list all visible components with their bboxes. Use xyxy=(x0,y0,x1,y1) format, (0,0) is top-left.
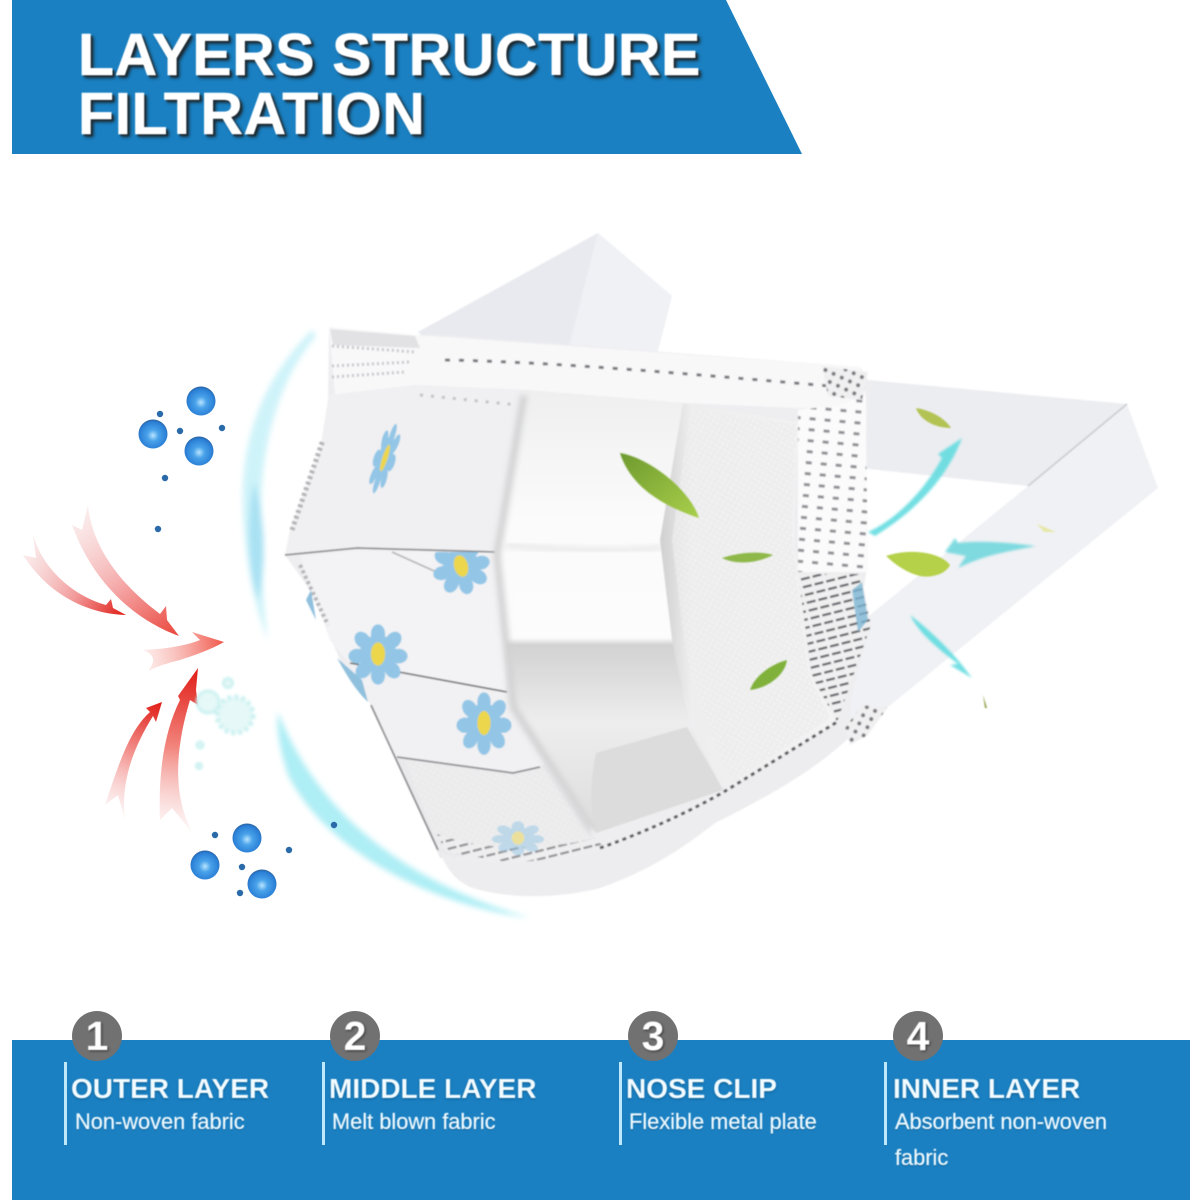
feature: outer layer: 1 xyxy=(86,1013,108,1059)
cyan airflow arrows on exit xyxy=(868,438,1036,678)
feature: outer layer xyxy=(71,1013,269,1134)
feature: inner layer: 4 xyxy=(907,1013,929,1059)
red arrow 2 xyxy=(72,505,179,636)
feature: middle layer: 2 xyxy=(344,1013,366,1059)
arrow middle xyxy=(945,538,1036,568)
title: LAYERS STRUCTURE xyxy=(78,22,701,88)
red arrow 3 xyxy=(143,632,224,671)
left airflow group xyxy=(23,330,530,918)
flowers printed on outer layer xyxy=(306,421,544,855)
leaf 4 xyxy=(916,408,951,428)
leaf 2 xyxy=(722,553,773,562)
leaf 5 xyxy=(886,552,950,577)
feature: inner layer: Absorbent non-woven xyxy=(895,1109,1107,1134)
feature: nose clip: NOSE CLIP xyxy=(626,1073,777,1104)
outer pleat 1 xyxy=(285,385,527,555)
outer layer pleats xyxy=(285,385,604,864)
feature: inner layer xyxy=(893,1013,1107,1170)
inner layer xyxy=(660,403,837,790)
feature: nose clip: Flexible metal plate xyxy=(629,1109,817,1134)
outer pleat 3 xyxy=(350,664,545,773)
leaf 7 xyxy=(1037,524,1056,532)
feature: nose clip: 3 xyxy=(642,1013,664,1059)
feature: middle layer: MIDDLE LAYER xyxy=(329,1073,536,1104)
mask base silhouette xyxy=(285,327,871,896)
footer panel xyxy=(12,1040,1190,1200)
virus icon xyxy=(196,678,253,768)
outer pleat 4 xyxy=(397,758,600,858)
feature: middle layer: Melt blown fabric xyxy=(332,1109,496,1134)
red arrow 5 xyxy=(160,668,198,832)
middle layer xyxy=(497,390,723,833)
feature: middle layer xyxy=(329,1013,536,1134)
red arrow 1 xyxy=(23,535,126,615)
feature: outer layer: Non-woven fabric xyxy=(75,1109,245,1134)
feature: nose clip xyxy=(626,1013,817,1135)
leaf 3 xyxy=(750,660,787,690)
title xyxy=(78,22,704,147)
outer pleat 2 xyxy=(300,550,507,692)
feature: outer layer: OUTER LAYER xyxy=(71,1073,269,1104)
green leaves xyxy=(620,408,1056,708)
top ear strap xyxy=(418,233,672,362)
leaf 6 xyxy=(983,695,987,708)
feature: inner layer: INNER LAYER xyxy=(893,1073,1080,1104)
bottom binding xyxy=(440,705,887,896)
top binding band xyxy=(329,327,866,410)
feature: inner layer: fabric xyxy=(895,1145,948,1170)
cyan shield arc lower xyxy=(277,712,530,918)
water droplets lower xyxy=(190,822,337,898)
leaf 1 xyxy=(620,453,699,518)
mask xyxy=(285,233,1158,896)
red arrow 4 xyxy=(105,702,162,820)
water droplets upper xyxy=(138,386,225,532)
cyan shield arc upper xyxy=(243,330,316,640)
footer divider lines xyxy=(64,1062,887,1145)
arrow down right xyxy=(910,615,972,678)
title: FILTRATION xyxy=(78,81,425,147)
perforated right edge xyxy=(798,366,871,722)
arrow up right xyxy=(868,438,962,536)
right ear strap xyxy=(840,380,1158,725)
header banner xyxy=(12,0,802,154)
number badges xyxy=(72,1011,943,1061)
